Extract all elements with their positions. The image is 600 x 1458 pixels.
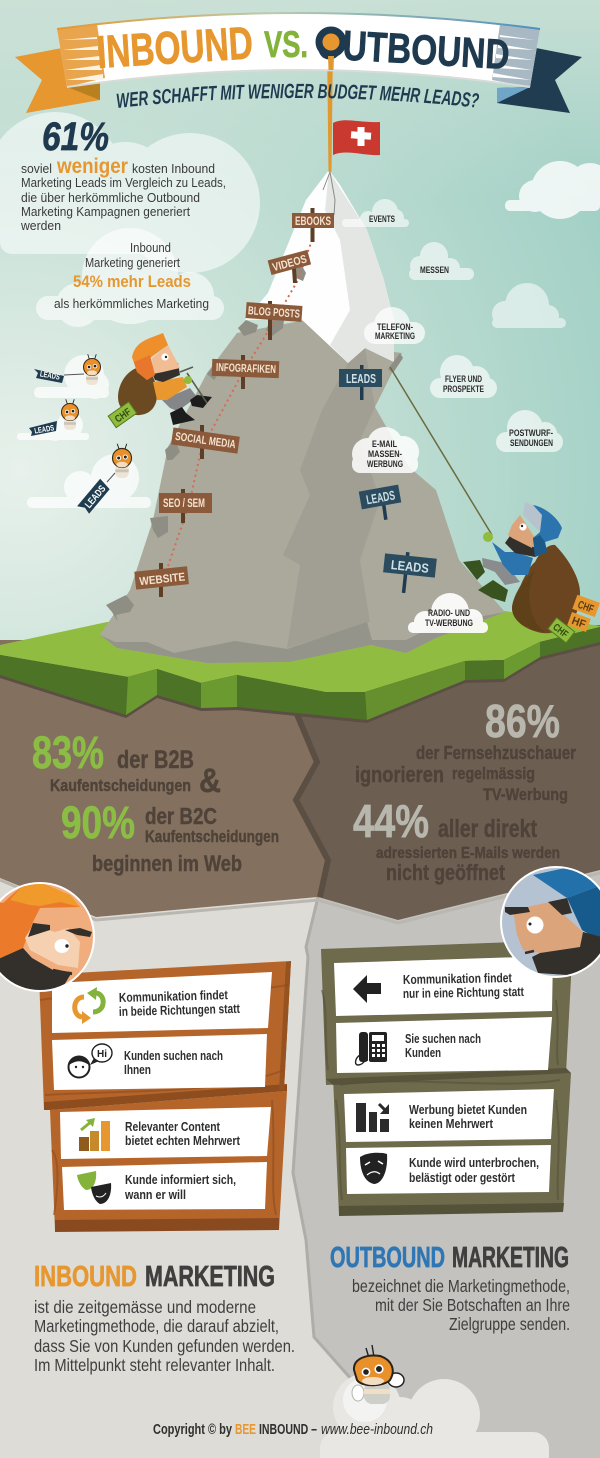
mountain xyxy=(100,170,505,663)
card: customers search for you xyxy=(52,1034,267,1090)
card: two-way communication: in beide Richtungen statt xyxy=(119,1001,241,1019)
sign: leads 2 xyxy=(359,485,401,520)
postwurf cloud xyxy=(496,410,563,452)
stat: 61 percent: kosten Inbound xyxy=(132,161,215,176)
flyer und prospekte cloud: PROSPEKTE xyxy=(443,384,484,395)
stat: 61 percent: werden xyxy=(20,218,61,233)
right ribbon tail xyxy=(497,48,582,113)
stat: 83 and 90 percent: & xyxy=(199,762,221,800)
stat: 54 percent more leads: als herkömmliches Marketing xyxy=(54,296,209,311)
earth layer xyxy=(0,625,600,923)
stat: 83 and 90 percent: Kaufentscheidungen xyxy=(145,828,279,846)
boots xyxy=(170,407,195,425)
card: cold calling: Kunden xyxy=(405,1045,441,1060)
sign: videos xyxy=(268,250,311,283)
card: customers search for you: Kunden suchen nach xyxy=(124,1048,223,1063)
stone ground, right side xyxy=(293,860,600,1458)
ice axe xyxy=(180,367,207,403)
events cloud: EVENTS xyxy=(369,214,395,225)
bee with leads banner 1 xyxy=(34,354,100,385)
sign: blog posts xyxy=(246,301,302,340)
stat: 83 and 90 percent: 83% xyxy=(32,727,104,778)
stat: 44 percent: nicht geöffnet xyxy=(386,860,506,885)
face xyxy=(152,345,180,374)
postwurf cloud: SENDUNGEN xyxy=(510,438,553,449)
sign: social media: SOCIAL MEDIA xyxy=(174,431,236,451)
e-mail cloud: WERBUNG xyxy=(367,459,403,470)
sign: ebooks xyxy=(292,208,334,242)
sign: leads 2: LEADS xyxy=(365,487,396,507)
title: VS. xyxy=(264,24,308,65)
subtitle: WER SCHAFFT MIT WENIGER BUDGET MEHR LEADS? xyxy=(116,84,480,108)
sign: blog posts: BLOG POSTS xyxy=(248,305,301,321)
stat: 44 percent: adressierten E-Mails werden xyxy=(376,845,560,862)
card: customer is interrupted: Kunde wird unterbrochen, xyxy=(409,1155,539,1170)
stat: 83 and 90 percent: beginnen im Web xyxy=(92,851,242,876)
card: two-way communication xyxy=(52,972,272,1033)
card: relevant content: bietet echten Mehrwert xyxy=(125,1133,241,1148)
outbound climber xyxy=(463,502,600,643)
e-mail cloud xyxy=(352,427,419,473)
postwurf cloud: POSTWURF- xyxy=(509,428,553,439)
inbound marketing definition xyxy=(34,1261,295,1375)
bee with leads banner 2: LEADS xyxy=(34,423,55,436)
messen cloud xyxy=(409,242,474,280)
stat: 44 percent: 44% xyxy=(353,795,429,847)
card: one-way communication: nur in eine Richtung statt xyxy=(403,984,525,1001)
card: cold calling xyxy=(336,1017,552,1073)
stat: 86 percent: regelmässig xyxy=(452,765,535,783)
outbound marketing definition xyxy=(330,1242,570,1334)
bee clouds on the left xyxy=(17,355,151,508)
sign: leads 3 xyxy=(383,552,437,593)
messen cloud: MESSEN xyxy=(420,265,449,276)
crack between the stone sides xyxy=(293,897,352,1380)
title: OUTBOUND xyxy=(315,20,511,78)
stat: 61 percent: Marketing Kampagnen generiert xyxy=(21,204,190,219)
card: relevant content xyxy=(60,1107,271,1159)
left ribbon tail xyxy=(15,48,100,113)
e-mail cloud: E-MAIL xyxy=(372,439,397,450)
grass top surface xyxy=(0,611,600,692)
title: INBOUND xyxy=(95,16,254,78)
card: customer informs himself: Kunde informiert sich, xyxy=(125,1172,236,1187)
card: no added value xyxy=(344,1089,554,1142)
e-mail cloud: MASSEN- xyxy=(368,449,402,460)
hood xyxy=(533,505,562,557)
top right cloud xyxy=(505,161,600,219)
sign: infografiken xyxy=(212,355,279,389)
face xyxy=(508,515,535,548)
copyright: INBOUND – xyxy=(259,1422,317,1438)
events cloud xyxy=(342,199,409,227)
inbound marketing definition: Im Mittelpunkt steht relevanter Inhalt. xyxy=(34,1355,275,1375)
CHF notes xyxy=(572,595,600,617)
card: cold calling: Sie suchen nach xyxy=(405,1031,481,1046)
card: customer informs himself: wann er will xyxy=(124,1187,186,1202)
boots xyxy=(463,560,485,580)
wooden sign: inbound xyxy=(39,961,291,1232)
stat: 61 percent: Marketing Leads im Vergleich zu Leads, xyxy=(21,175,226,190)
stat: 54 percent more leads xyxy=(54,240,209,311)
stat: 86 percent: ignorieren xyxy=(355,762,444,787)
card: one-way communication: Kommunikation findet xyxy=(403,970,513,987)
stat: 86 percent: 86% xyxy=(485,695,560,747)
sign: website xyxy=(134,563,189,597)
stat: 83 and 90 percent: 90% xyxy=(61,797,135,848)
telefon-marketing cloud: TELEFON- xyxy=(377,322,413,333)
card: customer is interrupted: belästigt oder gestört xyxy=(409,1170,516,1185)
stat: 61 percent: soviel xyxy=(21,161,52,176)
sign: leads 3: LEADS xyxy=(390,557,430,576)
wooden sign: outbound xyxy=(321,940,573,1216)
beard xyxy=(505,533,535,557)
outbound climber: HF xyxy=(570,615,588,631)
portrait: outbound marketer xyxy=(500,866,600,978)
bee mascot xyxy=(352,1345,404,1404)
CHF note: CHF xyxy=(113,407,133,425)
card: customer is interrupted xyxy=(346,1145,551,1194)
rope xyxy=(390,367,492,535)
card: one-way communication xyxy=(334,956,553,1016)
snow cap xyxy=(245,170,394,363)
legs xyxy=(162,388,197,413)
card: customers search for you: Hi xyxy=(97,1049,107,1060)
inbound marketing definition: INBOUND xyxy=(34,1261,137,1293)
portrait: inbound marketer xyxy=(0,882,95,992)
radio cloud: RADIO- UND xyxy=(428,608,470,619)
cap xyxy=(523,502,542,532)
banner xyxy=(15,13,582,113)
sign: leads 1 xyxy=(339,365,382,400)
cloud right xyxy=(492,283,566,328)
hood xyxy=(132,333,168,380)
stat: 83 and 90 percent: Kaufentscheidungen xyxy=(50,777,191,795)
outbound marketing definition: OUTBOUND xyxy=(330,1242,445,1274)
bee with leads banner 1: LEADS xyxy=(39,369,61,382)
sign: infografiken: INFOGRAFIKEN xyxy=(216,362,276,376)
copyright xyxy=(153,1422,433,1438)
cloud at bottom xyxy=(320,1373,549,1458)
bee with leads banner 3: LEADS xyxy=(83,484,109,511)
sign: videos: VIDEOS xyxy=(271,253,308,274)
stat: 83 and 90 percent xyxy=(32,727,279,876)
body xyxy=(492,542,533,575)
rock ledges xyxy=(106,266,403,622)
copyright: www.bee-inbound.ch xyxy=(321,1422,433,1438)
stat: 86 percent: TV-Werbung xyxy=(483,786,568,804)
inbound marketing definition: ist die zeitgemässe und moderne xyxy=(34,1297,256,1317)
sign: ebooks: EBOOKS xyxy=(295,216,331,228)
beard xyxy=(152,363,180,382)
second cloud xyxy=(36,228,224,327)
bee with leads banner 3 xyxy=(77,444,132,515)
flyer und prospekte cloud xyxy=(430,355,497,398)
radio cloud: TV-WERBUNG xyxy=(425,618,473,629)
inbound marketing definition: dass Sie von Kunden gefunden werden. xyxy=(34,1336,295,1356)
stat: 54 percent more leads: 54% mehr Leads xyxy=(73,273,191,291)
radio cloud xyxy=(408,593,488,633)
card: no added value: keinen Mehrwert xyxy=(409,1116,494,1131)
card: no added value: Werbung bietet Kunden xyxy=(409,1102,527,1117)
sign: seo sem: SEO / SEM xyxy=(163,498,205,510)
stat: 83 and 90 percent: der B2C xyxy=(145,803,217,829)
flag pole xyxy=(327,42,333,172)
grass front face xyxy=(0,627,600,723)
money bag xyxy=(512,545,580,633)
sign: social media xyxy=(171,425,240,459)
stat: 61 percent: 61% xyxy=(42,115,109,159)
stat: 44 percent xyxy=(353,795,560,885)
card: customer informs himself xyxy=(62,1162,267,1210)
inbound marketing definition: Marketingmethode, die darauf abzielt, xyxy=(34,1316,279,1336)
stat: 44 percent: aller direkt xyxy=(438,815,538,843)
money bag xyxy=(118,367,157,415)
stat: 86 percent xyxy=(355,695,576,804)
telefon-marketing cloud: MARKETING xyxy=(375,331,415,342)
telefon-marketing cloud xyxy=(364,307,425,344)
stat: 83 and 90 percent: der B2B xyxy=(117,746,194,774)
sign: leads 1: LEADS xyxy=(346,371,376,386)
sign: seo sem xyxy=(159,489,212,523)
outbound climber: CHF xyxy=(550,622,570,640)
card: relevant content: Relevanter Content xyxy=(125,1119,221,1134)
stat: 61 percent xyxy=(20,115,226,233)
ribbon body xyxy=(57,13,540,87)
wood boards xyxy=(321,940,573,1216)
stat: 54 percent more leads: Marketing generiert xyxy=(85,255,180,270)
bee with leads banner 2 xyxy=(29,399,78,436)
stone ground, left side xyxy=(0,860,600,1458)
hand xyxy=(483,532,493,542)
sky background xyxy=(0,0,600,700)
body xyxy=(153,377,187,400)
inbound climber xyxy=(108,333,212,428)
title xyxy=(95,16,511,78)
flyer und prospekte cloud: FLYER UND xyxy=(445,374,482,385)
stat: 61 percent: die über herkömmliche Outbound xyxy=(21,190,200,205)
big cloud xyxy=(0,112,260,273)
swiss flag xyxy=(333,120,380,155)
card: customers search for you: Ihnen xyxy=(124,1062,151,1077)
sign: website: WEBSITE xyxy=(139,571,186,588)
stat: 54 percent more leads: Inbound xyxy=(130,240,171,255)
dotted inbound path xyxy=(168,240,312,566)
wood boards xyxy=(39,961,291,1232)
card: two-way communication: Kommunikation findet xyxy=(119,987,229,1005)
inbound marketing definition: MARKETING xyxy=(145,1261,275,1293)
outbound marketing definition: Zielgruppe senden. xyxy=(449,1314,570,1334)
copyright: BEE xyxy=(235,1422,256,1438)
legs xyxy=(482,558,520,585)
stat: 61 percent: weniger xyxy=(56,155,128,178)
copyright: Copyright © by xyxy=(153,1422,232,1438)
